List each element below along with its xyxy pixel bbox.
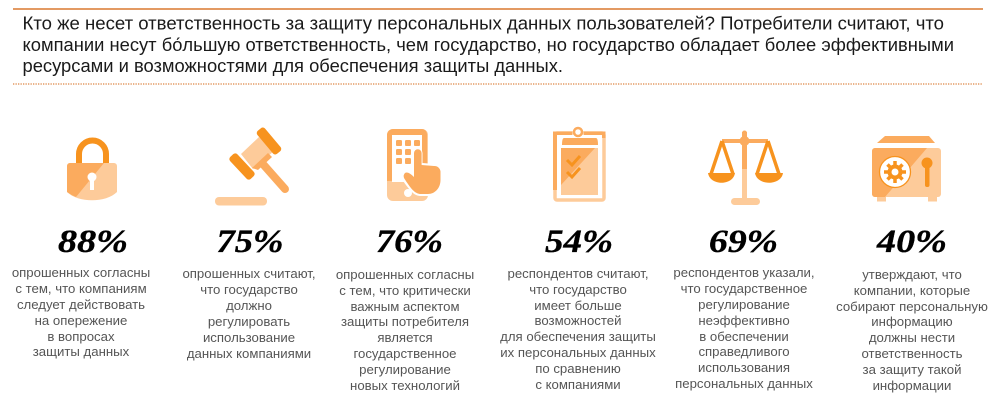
description: их персональных данных (500, 345, 656, 360)
description: следует действовать (17, 297, 145, 312)
description: информации (873, 378, 951, 393)
heading text: ресурсами и возможностями для обеспечения защиты данных. (22, 55, 563, 76)
icon: scales (708, 130, 783, 205)
description: с компаниями (535, 377, 621, 392)
description (182, 266, 316, 361)
description: опрошенных считают, (182, 266, 316, 281)
description: компании, которые (854, 283, 970, 298)
percentage: 69% (709, 224, 778, 260)
description: справедливого (698, 344, 790, 359)
column 3: 76% (336, 129, 474, 393)
description: персональных данных (675, 376, 813, 391)
column 2: 75% (182, 126, 316, 361)
description: защиты данных (33, 344, 130, 359)
description: в обеспечении (699, 329, 789, 344)
description: регулирование (698, 297, 790, 312)
percentage: 40% (876, 224, 947, 260)
description: что государство (529, 282, 627, 297)
description: с тем, что компаниям (15, 281, 147, 296)
description: информацию (871, 314, 953, 329)
heading text: компании несут бо́льшую ответственность, чем государство, но государство обладает более эффективными (22, 34, 954, 55)
description: опрошенных согласны (336, 267, 474, 282)
description: утверждают, что (862, 267, 962, 282)
description: использования (698, 360, 790, 375)
column 6: 40% (836, 136, 988, 393)
description: по сравнению (535, 361, 621, 376)
description: должно (226, 298, 272, 313)
description (336, 267, 474, 393)
description: имеет больше (534, 298, 622, 313)
description: за защиту такой (863, 362, 961, 377)
column 1: 88% (12, 140, 150, 359)
description: является (377, 330, 433, 345)
icon: smartphone with hand (387, 129, 442, 201)
icon: clipboard (553, 128, 606, 200)
description: в вопросах (47, 329, 115, 344)
column 4: 54% (500, 128, 656, 392)
percentage: 76% (376, 224, 443, 260)
description: регулировать (208, 314, 290, 329)
description: что государственное (681, 281, 807, 296)
percentage: 75% (216, 224, 284, 260)
description: опрошенных согласны (12, 265, 150, 280)
description: данных компаниями (187, 346, 311, 361)
description: что государство (200, 282, 298, 297)
description (673, 265, 815, 391)
description: собирают персональную (836, 299, 988, 314)
description: респондентов считают, (508, 266, 648, 281)
description: регулирование (359, 362, 451, 377)
description (500, 266, 656, 392)
description (836, 267, 988, 393)
description: с тем, что критически (339, 283, 471, 298)
percentage: 54% (545, 224, 613, 260)
description: на опережение (35, 313, 127, 328)
heading text: Кто же несет ответственность за защиту персональных данных пользователей? Потребители считают, что (22, 12, 944, 34)
description: респондентов указали, (673, 265, 815, 280)
description: должны нести (869, 330, 955, 345)
description: новых технологий (350, 378, 460, 393)
description (12, 265, 150, 359)
description: возможностей (535, 313, 621, 328)
description: использование (203, 330, 295, 345)
heading text (22, 12, 954, 76)
percentage: 88% (58, 224, 128, 260)
icon: gavel (215, 126, 285, 206)
description: неэффективно (698, 313, 790, 328)
icon: padlock (67, 140, 117, 200)
icon: safe (872, 136, 941, 202)
description: важным аспектом (350, 299, 460, 314)
column 5: 69% (673, 130, 815, 391)
description: защиты потребителя (341, 314, 469, 329)
description: для обеспечения защиты (500, 329, 656, 344)
description: ответственность (862, 346, 963, 361)
description: государственное (353, 346, 457, 361)
